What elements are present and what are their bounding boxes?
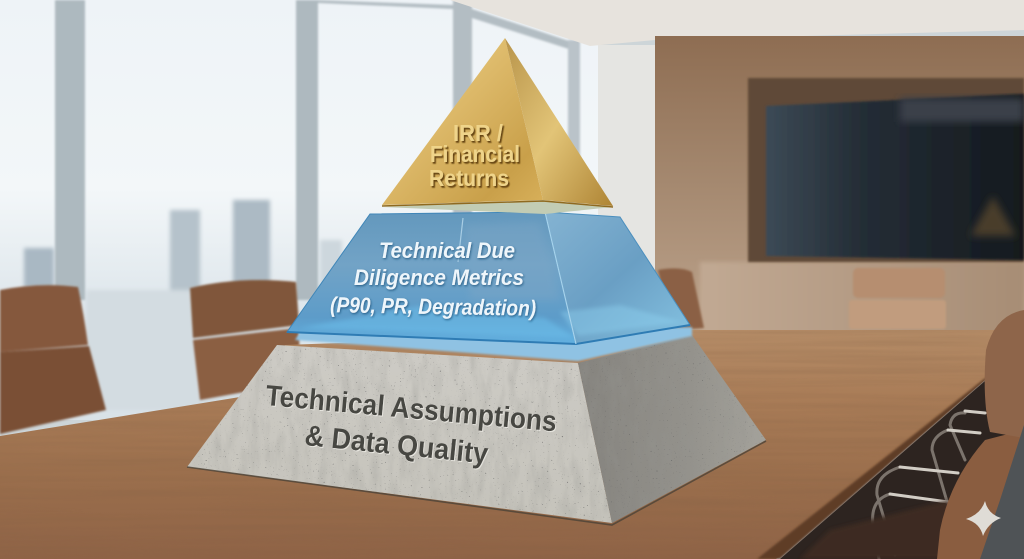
lower wall under display: [700, 262, 1024, 334]
conference table: [0, 330, 1000, 559]
gold shadow rim: [383, 200, 613, 214]
ceiling: [450, 0, 1024, 46]
background: office room: [0, 0, 1024, 420]
concrete tier: [187, 327, 766, 525]
engraved label: & Data Quality: [303, 420, 490, 471]
engraved label: [264, 380, 558, 471]
glass label: Technical Due: [379, 238, 515, 263]
glass tier: [287, 212, 690, 344]
glass label: Diligence Metrics: [354, 265, 524, 290]
background chairs: [0, 268, 946, 434]
pyramid: [187, 38, 766, 525]
chair body: [937, 430, 1024, 559]
concrete front face: [187, 345, 612, 523]
city skyline: [24, 200, 342, 410]
wall-mounted display: [766, 94, 1024, 260]
gold base edge: [382, 201, 613, 207]
gold label: Returns: [429, 165, 509, 191]
glass label: (P90, PR, Degradation): [330, 292, 536, 321]
gold label: IRR /: [453, 120, 504, 146]
gold label: [429, 120, 520, 191]
glass label: [330, 238, 536, 321]
wood wall panel: [655, 36, 1024, 336]
watermark sparkle icon: [966, 501, 1001, 536]
gold right face: [505, 38, 613, 206]
glass right face: [545, 212, 690, 344]
window view: [0, 0, 600, 420]
blue glow on concrete top: [295, 327, 692, 361]
engraved label: Technical Assumptions: [264, 380, 558, 438]
window mullions: [55, 0, 580, 300]
concrete base edge: [187, 441, 766, 525]
under-table area: [780, 374, 1024, 559]
chair: left centre: [190, 280, 300, 400]
gold label: Financial: [430, 141, 520, 167]
display recess: [748, 78, 1024, 262]
foreground chair: [800, 310, 1024, 559]
table edge: [757, 374, 993, 559]
white wall: [598, 45, 656, 335]
chair headrest: [985, 310, 1024, 438]
glass front face: [287, 212, 576, 344]
chair: behind glass tier: [658, 268, 704, 330]
chair seat shadow: [800, 500, 950, 559]
concrete texture: [187, 345, 612, 523]
chair: far side of table: [849, 268, 946, 329]
glass reflections: [287, 212, 690, 344]
concrete right face: [578, 335, 766, 523]
chair frame: [980, 425, 1024, 559]
gold tier: [382, 38, 613, 214]
gold left face: [382, 38, 543, 205]
chair: far left: [0, 285, 106, 434]
chrome armrests: [873, 411, 985, 559]
